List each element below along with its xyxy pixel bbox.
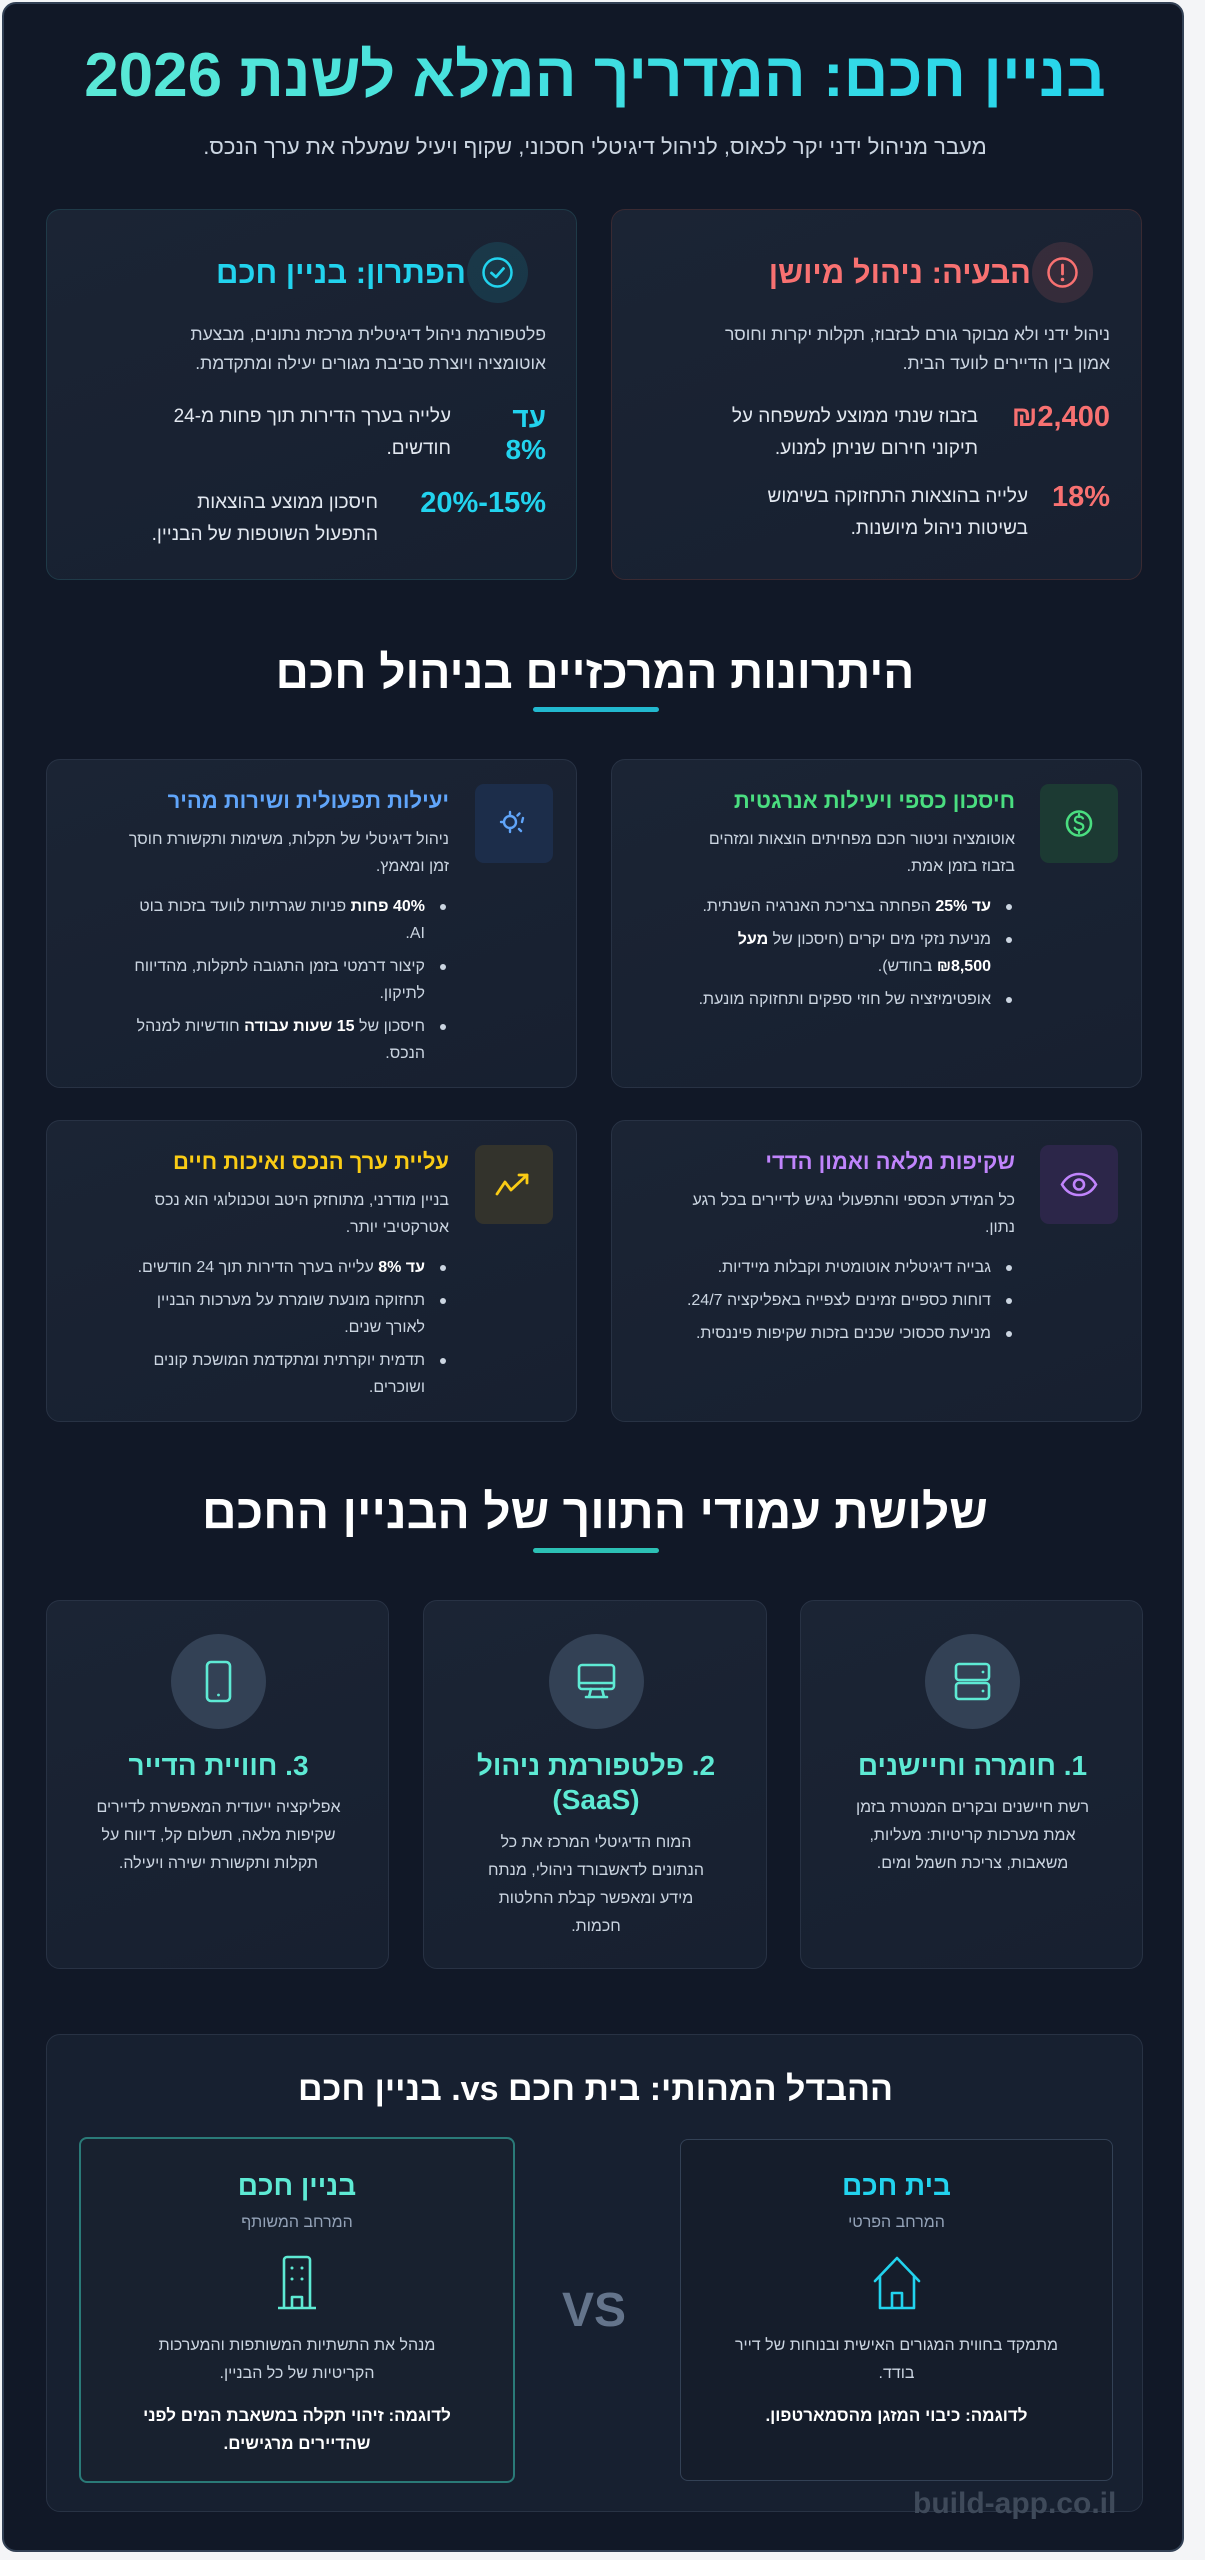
text block: בזבוז בזמן אמת. xyxy=(907,858,1015,875)
panel: problem xyxy=(611,209,1142,580)
bullet list: תחזוקה מונעת שומרת על מערכות הבניין xyxy=(157,1292,425,1309)
text block xyxy=(155,1192,449,1236)
text block: אוטומציה וניטור חכם מפחיתים הוצאות ומזהים xyxy=(709,831,1015,848)
text block: תקלות ותקשורת ישירה ויעילה. xyxy=(119,1855,318,1872)
text block xyxy=(96,1799,341,1872)
heading: ההבדל המהותי: בית חכם vs. בניין חכם xyxy=(298,2070,893,2108)
stat: 15-20%: 20%-15% xyxy=(420,487,546,519)
stat text xyxy=(152,492,378,545)
text block: משאבות, צריכת חשמל ומים. xyxy=(877,1855,1068,1872)
text block: ניהול ידני ולא מבוקר גורם לבזבוז, תקלות יקרות וחוסר xyxy=(725,324,1110,344)
heading: 3. חוויית הדייר xyxy=(128,1750,309,1781)
box: smart building xyxy=(79,2137,515,2483)
bullet list xyxy=(138,1259,446,1396)
stat text xyxy=(732,406,978,459)
text block: הנתונים לדאשבורד ניהולי, מנתח xyxy=(488,1862,704,1879)
text block: פלטפורמת ניהול דיגיטלית מרכזת נתונים, מבצעת xyxy=(190,324,546,344)
icon: trend up xyxy=(475,1145,553,1224)
text block: אמת מערכות קריטיות: מעליות, xyxy=(869,1827,1076,1844)
bullet list: ושוכרים. xyxy=(369,1379,425,1396)
heading: 2. פלטפורמת ניהול xyxy=(477,1750,715,1781)
icon: server xyxy=(925,1634,1020,1729)
example: לדוגמה: כיבוי המזגן מהסמארטפון. xyxy=(765,2406,1028,2425)
panel: pillar 1 hardware xyxy=(800,1600,1143,1969)
stat text xyxy=(174,406,451,459)
title: בניין חכם: המדריך המלא לשנת 2026 xyxy=(84,41,1106,110)
text block xyxy=(129,831,449,875)
heading: (SaaS) xyxy=(552,1784,640,1815)
text block xyxy=(856,1799,1089,1872)
bullet list xyxy=(687,1259,1012,1342)
panel: pillar 2 platform xyxy=(423,1600,767,1969)
text block xyxy=(735,2337,1058,2382)
stat text: תיקוני חירום שניתן למנוע. xyxy=(775,438,978,459)
example xyxy=(143,2406,451,2453)
watermark: build-app.co.il xyxy=(913,2487,1116,2520)
text block xyxy=(709,831,1015,875)
bullet list: מניעת סכסוכי שכנים בזכות שקיפות פיננסית. xyxy=(696,1325,991,1342)
text block: בניין מודרני, מתוחזק היטב וטכנולוגי הוא נכס xyxy=(155,1192,449,1209)
bullet list: אופטימיזציה של חוזי ספקים ותחזוקה מונעת. xyxy=(699,991,991,1008)
text block: זמן ומאמץ. xyxy=(376,858,449,875)
text block: בודד. xyxy=(879,2365,914,2382)
heading xyxy=(477,1750,715,1815)
panel: property value xyxy=(46,1120,577,1422)
panel: pillar 3 resident xyxy=(46,1600,389,1969)
subtitle: המרחב המשותף xyxy=(241,2214,353,2231)
panel: financial savings xyxy=(611,759,1142,1088)
heading: שקיפות מלאה ואמון הדדי xyxy=(765,1149,1015,1174)
heading: עליית ערך הנכס ואיכות חיים xyxy=(173,1149,449,1174)
heading: pillars: שלושת עמודי התווך של הבניין החכם xyxy=(202,1486,988,1539)
bullet list xyxy=(134,898,446,1062)
stat text: חודשים. xyxy=(386,438,451,459)
stat text: בשיטות ניהול מיושנות. xyxy=(851,518,1028,539)
example: שהדיירים מרגישים. xyxy=(224,2434,370,2453)
bullet list: הנכס. xyxy=(385,1045,425,1062)
bullet list: גבייה דיגיטלית אוטומטית וקבלות מיידיות. xyxy=(718,1259,991,1276)
icon: monitor xyxy=(549,1634,644,1729)
text block: אוטומציה ויוצרת סביבת מגורים יעילה ומתקדמת. xyxy=(195,353,546,373)
panel: operational efficiency xyxy=(46,759,577,1088)
text block: חכמות. xyxy=(571,1918,621,1935)
heading: 1. חומרה וחיישנים xyxy=(858,1750,1087,1781)
icon: phone xyxy=(171,1634,266,1729)
bullet list: AI. xyxy=(405,925,425,942)
text block: שקיפות מלאה, תשלום קל, דיווח על xyxy=(101,1827,336,1844)
text block xyxy=(159,2337,435,2382)
text block: ניהול דיגיטלי של תקלות, משימות ותקשורת חוסך xyxy=(129,831,449,848)
icon: alert xyxy=(1032,242,1093,303)
text block xyxy=(692,1192,1015,1236)
bullet list: חיסכון של 15 שעות עבודה חודשיות למנהל xyxy=(137,1018,425,1035)
stat text: חיסכון ממוצע בהוצאות xyxy=(197,492,378,513)
heading: benefits: היתרונות המרכזיים בניהול חכם xyxy=(276,646,914,698)
icon: dollar xyxy=(1040,784,1118,863)
panel: comparison xyxy=(46,2034,1143,2512)
heading: problem: הבעיה: ניהול מיושן xyxy=(769,255,1031,290)
bullet list: לתיקון. xyxy=(379,985,425,1002)
stat text xyxy=(768,486,1028,539)
icon: eye xyxy=(1040,1145,1118,1224)
text block: אמון בין הדיירים לוועד הבית. xyxy=(903,353,1110,373)
text block: רשת חיישנים ובקרים המנטרת בזמן xyxy=(856,1799,1089,1816)
subtitle: המרחב הפרטי xyxy=(848,2214,945,2231)
icon: check xyxy=(467,242,528,303)
stat text: בזבוז שנתי ממוצע למשפחה על xyxy=(732,406,978,427)
bullet list: תדמית יוקרתית ומתקדמת המושכת קונים xyxy=(153,1352,425,1369)
panel: solution xyxy=(46,209,577,580)
bullet list: מניעת נזקי מים יקרים (חיסכון של מעל xyxy=(738,931,991,948)
text block xyxy=(190,324,546,373)
text block: המוח הדיגיטלי המרכז את כל xyxy=(501,1834,691,1851)
text block: מידע ומאפשר קבלת החלטות xyxy=(499,1890,693,1907)
stat: up to 8%: עד xyxy=(512,402,546,433)
text block: אפליקציה ייעודית המאפשרת לדיירים xyxy=(96,1799,341,1816)
icon: gear xyxy=(475,784,553,863)
icon: house xyxy=(874,2256,920,2310)
stat text: התפעול השוטפות של הבניין. xyxy=(152,524,378,545)
bullet list: עד 8% עלייה בערך הדירות תוך 24 חודשים. xyxy=(138,1259,425,1276)
stat: up to 8%: 8% xyxy=(506,434,546,465)
text block: הקריטיות של כל הבניין. xyxy=(220,2365,374,2382)
text block xyxy=(488,1834,704,1935)
bullet list: דוחות כספיים זמינים לצפייה באפליקציה 24/7. xyxy=(687,1292,991,1309)
bullet list: קיצור דרמטי בזמן התגובה לתקלות, מהדיווח xyxy=(134,958,425,975)
heading: בית חכם xyxy=(842,2170,951,2201)
heading: חיסכון כספי ויעילות אנרגטית xyxy=(734,788,1015,813)
text block: נתון. xyxy=(985,1219,1015,1236)
vs label: VS xyxy=(562,2284,626,2337)
text block: מתמקד בחווית המגורים האישית ובנוחות של דייר xyxy=(735,2337,1058,2354)
text block xyxy=(725,324,1110,373)
stat: 2400: ₪2,400 xyxy=(1012,401,1110,433)
example: לדוגמה: זיהוי תקלה במשאבת המים לפני xyxy=(143,2406,451,2425)
box: smart home xyxy=(680,2139,1113,2481)
icon: building xyxy=(278,2256,316,2310)
bullet list: עד 25% הפחתה בצריכת האנרגיה השנתית. xyxy=(702,898,991,915)
heading: solution: הפתרון: בניין חכם xyxy=(216,255,466,290)
heading: יעילות תפעולית ושירות מהיר xyxy=(168,788,449,813)
bullet list: 40% פחות פניות שגרתיות לוועד בזכות בוט xyxy=(139,898,425,915)
panel: transparency xyxy=(611,1120,1142,1422)
stat: up to 8% xyxy=(506,402,546,465)
text block: אטרקטיבי יותר. xyxy=(346,1219,449,1236)
bullet list: לאורך שנים. xyxy=(344,1319,425,1336)
subtitle: מעבר מניהול ידני יקר לכאוס, לניהול דיגיטלי חסכוני, שקוף ויעיל שמעלה את ערך הנכס. xyxy=(203,134,987,159)
heading: בניין חכם xyxy=(238,2170,356,2201)
stat text: עלייה בהוצאות התחזוקה בשימוש xyxy=(768,486,1028,507)
stat text: עלייה בערך הדירות תוך פחות מ-24 xyxy=(174,406,451,427)
text block: כל המידע הכספי והתפעולי נגיש לדיירים בכל רגע xyxy=(692,1192,1015,1209)
text block: מנהל את התשתיות המשותפות והמערכות xyxy=(159,2337,435,2354)
bullet list xyxy=(699,898,1012,1008)
bullet list: ₪8,500 בחודש). xyxy=(878,958,991,975)
stat: 18%: 18% xyxy=(1052,481,1110,513)
